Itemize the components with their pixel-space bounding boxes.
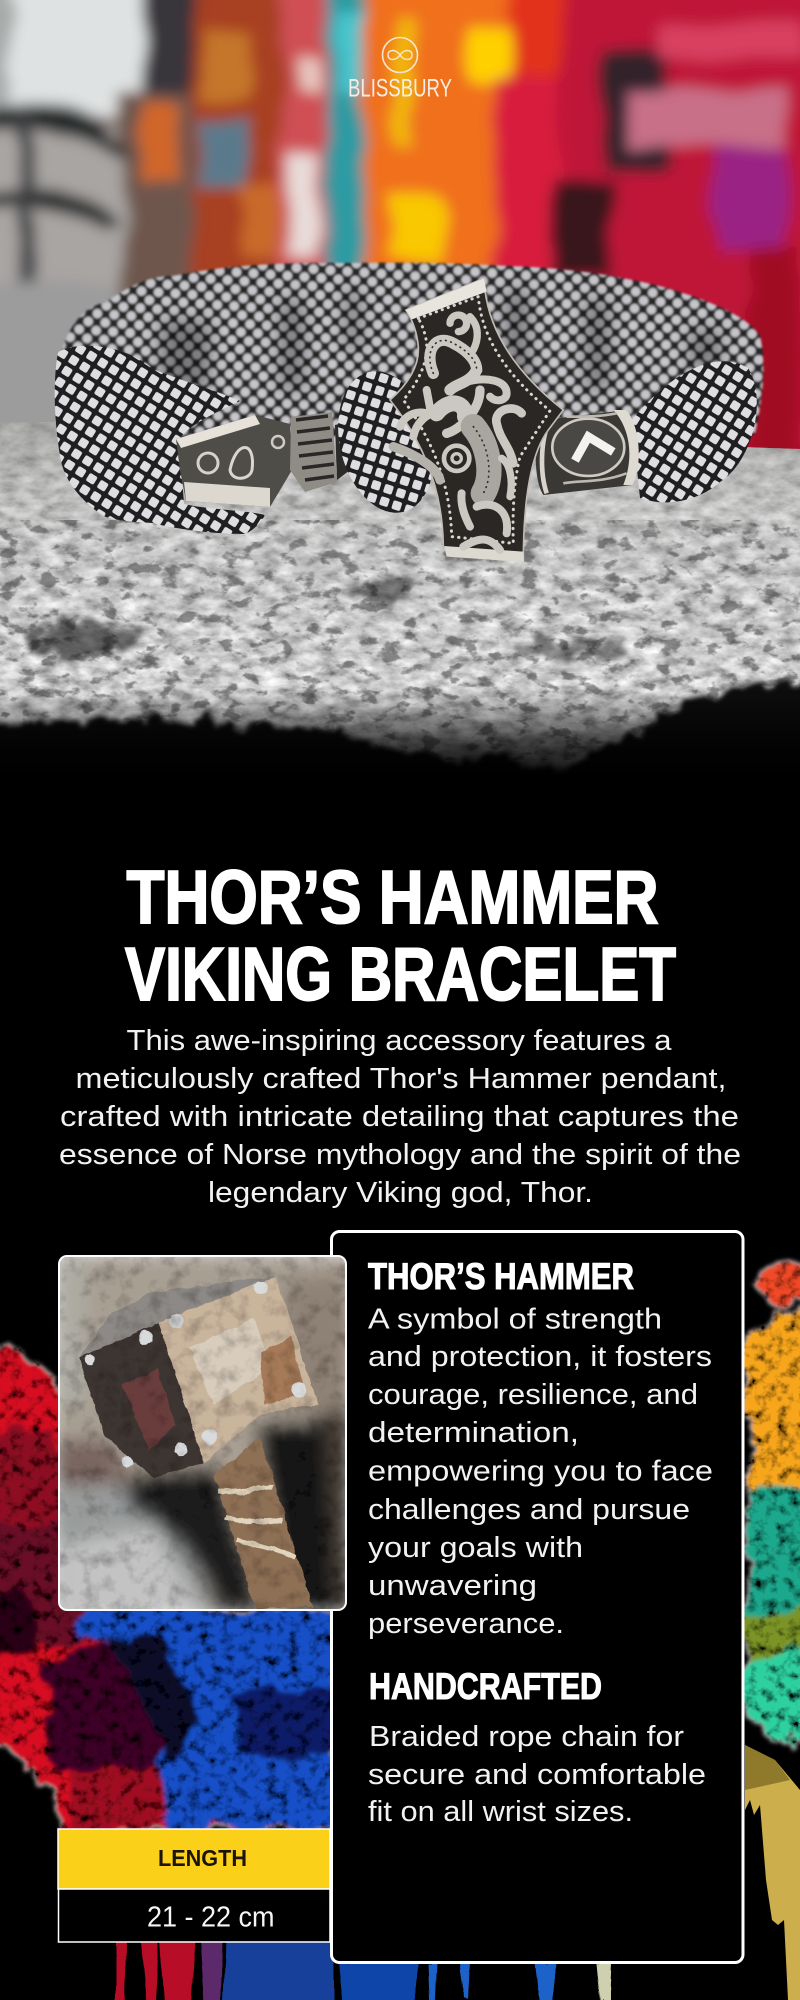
length table: [58, 1829, 330, 1942]
handle: [214, 1437, 314, 1608]
heading: Thor's Hammer: THOR’S HAMMER: [368, 1256, 634, 1297]
body: Thor's Hammer description: challenges and pursue: [368, 1494, 690, 1526]
title: [125, 855, 676, 1016]
intro paragraph: [59, 1025, 741, 1209]
intro paragraph: crafted with intricate detailing that captures the: [60, 1101, 739, 1133]
body: Thor's Hammer description: courage, resilience, and: [368, 1379, 698, 1411]
blurred graffiti wall backdrop: [0, 0, 800, 499]
hammer illustration: [51, 1251, 357, 1618]
knotwork: [393, 315, 522, 550]
intro paragraph: This awe-inspiring accessory features a: [126, 1025, 672, 1057]
body: Thor's Hammer description: A symbol of strength: [368, 1304, 662, 1336]
paint splash: left red and blue: [0, 1346, 340, 1835]
hammer head front face: [158, 1277, 319, 1463]
length header: [58, 1829, 330, 1889]
hammer head top face: [79, 1276, 276, 1358]
hammer head left face: [79, 1322, 204, 1478]
right rope knot: [632, 361, 757, 502]
body: Handcrafted description: secure and comfortable: [368, 1759, 706, 1791]
length value: [58, 1889, 330, 1942]
body: Thor's Hammer description: determination,: [368, 1417, 579, 1449]
body: Handcrafted description: Braided rope chain for: [369, 1721, 684, 1753]
left clasp with knot engraving: [176, 412, 355, 507]
body: Thor's Hammer description: [368, 1304, 713, 1640]
body: Thor's Hammer description: perseverance.: [368, 1608, 564, 1640]
brand logo: Blissbury: BLISSBURY: [348, 74, 452, 102]
length header: LENGTH: [158, 1845, 247, 1871]
bracelet back band: [61, 261, 765, 445]
body: Handcrafted description: [368, 1721, 706, 1828]
rope knot around pendant: [324, 361, 448, 523]
paint drips: bottom: [115, 1940, 612, 2000]
info panel: [332, 1232, 743, 1962]
length value: 21 - 22 cm: [147, 1902, 274, 1934]
body: Thor's Hammer description: unwavering: [368, 1570, 537, 1602]
body: Handcrafted description: fit on all wrist sizes.: [368, 1796, 633, 1828]
heading: Handcrafted: HANDCRAFTED: [369, 1666, 602, 1707]
brand logo: Blissbury: [348, 38, 452, 102]
title: VIKING BRACELET: [125, 932, 676, 1016]
paint splash: right orange green yellow: [745, 1262, 800, 2000]
Mjolnir pendant: [390, 278, 563, 562]
right rune bead: [536, 410, 639, 495]
watercolor backdrop: [60, 1257, 345, 1609]
title: THOR’S HAMMER: [126, 855, 658, 939]
intro paragraph: essence of Norse mythology and the spirit of the: [59, 1139, 741, 1171]
intro paragraph: meticulously crafted Thor's Hammer pendant,: [76, 1063, 727, 1095]
pendant body: [390, 278, 563, 562]
hero photo: bracelet on concrete: [0, 0, 800, 850]
yellow drips: [745, 1745, 800, 2000]
intro paragraph: legendary Viking god, Thor.: [208, 1177, 593, 1209]
body: Thor's Hammer description: and protection, it fosters: [368, 1341, 712, 1373]
concrete ledge: [0, 400, 800, 850]
body: Thor's Hammer description: empowering you to face: [368, 1456, 713, 1488]
body: Thor's Hammer description: your goals with: [368, 1532, 583, 1564]
bracelet front left rope loop: [55, 346, 265, 534]
rivets: [86, 1281, 307, 1467]
